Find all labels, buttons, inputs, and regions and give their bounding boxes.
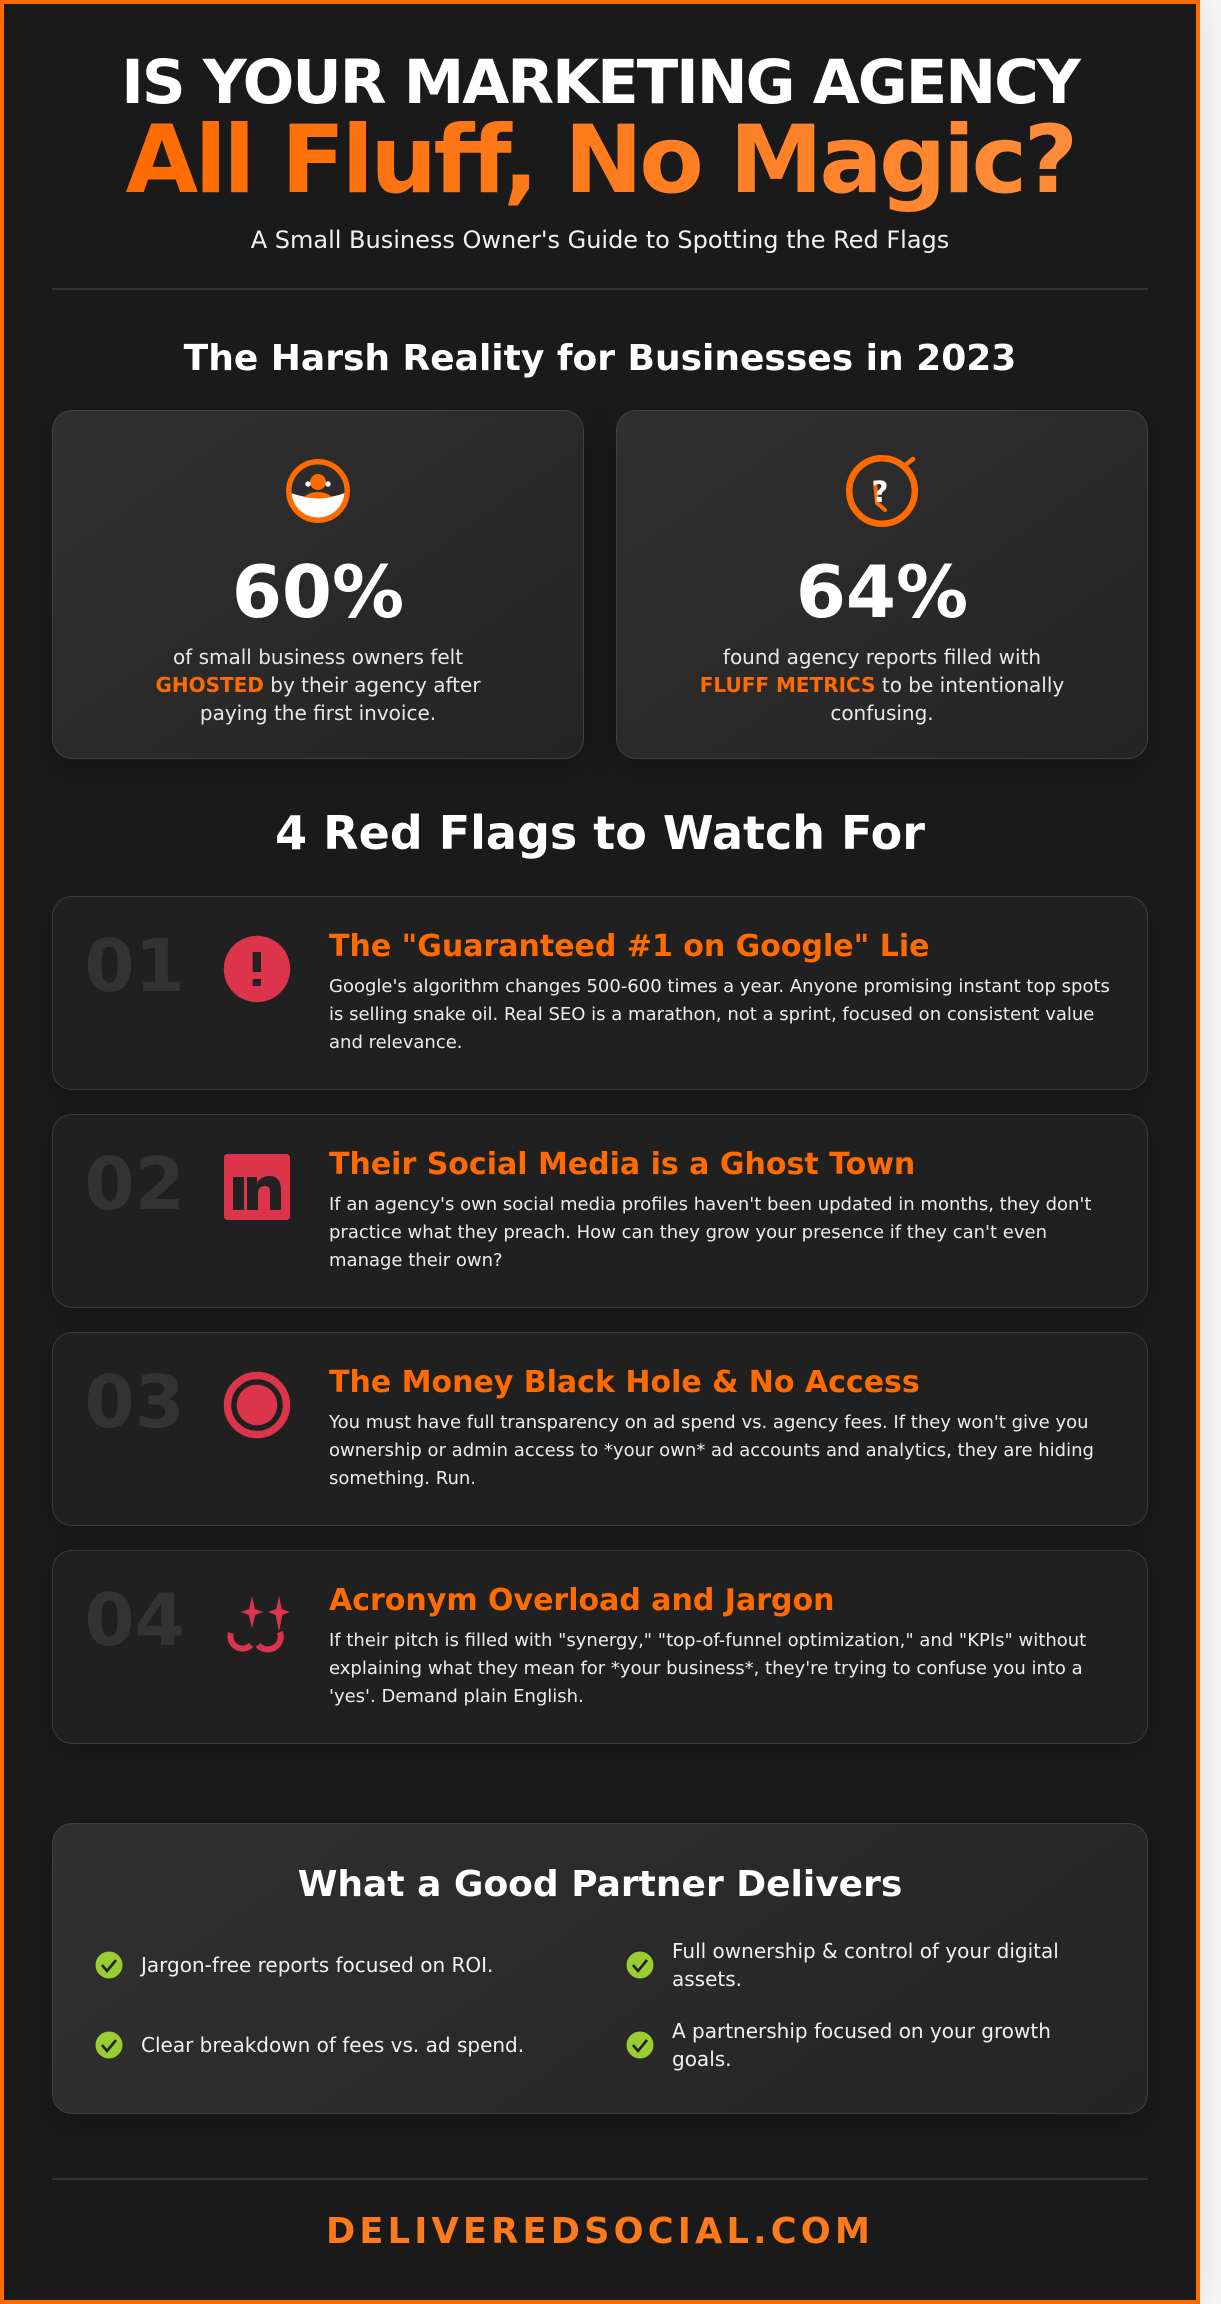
flag body: ownership or admin access to *your own* ad accounts and analytics, they are hiding — [329, 1440, 1094, 1460]
item text: Clear breakdown of fees vs. ad spend. — [141, 2033, 524, 2057]
flag number: 02 — [84, 1142, 185, 1226]
item text — [672, 2019, 1051, 2071]
partner heading: What a Good Partner Delivers — [298, 1864, 902, 1905]
stat description — [155, 645, 481, 725]
icon: check — [96, 2032, 122, 2058]
flag body: and relevance. — [329, 1032, 463, 1052]
panel: flag 02 — [52, 1114, 1148, 1308]
flag body — [329, 1630, 1086, 1706]
icon: black hole target — [224, 1372, 290, 1438]
item text: A partnership focused on your growth — [672, 2019, 1051, 2043]
icon: exclamation — [224, 936, 290, 1002]
icon: check — [96, 1952, 122, 1978]
icon: ghosted person — [286, 459, 350, 523]
flag body: is selling snake oil. Real SEO is a marathon, not a sprint, focused on consistent value — [329, 1004, 1094, 1024]
item text — [672, 1939, 1059, 1991]
panel: flag 04 — [52, 1550, 1148, 1744]
icon: magnifying clock question: ? — [872, 475, 888, 509]
flag body: something. Run. — [329, 1468, 476, 1488]
item text: Full ownership & control of your digital — [672, 1939, 1059, 1963]
stat description: GHOSTED by their agency after — [155, 673, 481, 697]
panel: stat 64% — [616, 410, 1148, 759]
panel: flag 03 — [52, 1332, 1148, 1526]
heading: harsh reality: The Harsh Reality for Businesses in 2023 — [184, 338, 1016, 379]
flag body — [329, 976, 1110, 1052]
stat number 60%: 60% — [232, 550, 404, 634]
panel: stat 60% — [52, 410, 584, 759]
subtitle: A Small Business Owner's Guide to Spotting the Red Flags — [251, 226, 949, 254]
item text: Jargon-free reports focused on ROI. — [141, 1953, 493, 1977]
stat description — [700, 645, 1064, 725]
icon: check — [626, 2032, 654, 2058]
flag body: Google's algorithm changes 500-600 times a year. Anyone promising instant top spots — [329, 976, 1110, 996]
title: first line: IS YOUR MARKETING AGENCY — [121, 48, 1079, 118]
title: second line: All Fluff, No Magic? — [125, 106, 1075, 214]
item: partnership — [626, 2019, 1051, 2071]
stat number 64%: 64% — [796, 550, 968, 634]
footer url: DELIVEREDSOCIAL.COM — [326, 2211, 874, 2252]
stat description: confusing. — [830, 701, 934, 725]
flag body — [329, 1412, 1094, 1488]
flag title: The Money Black Hole & No Access — [329, 1365, 920, 1400]
flag body: You must have full transparency on ad spend vs. agency fees. If they won't give you — [329, 1412, 1089, 1432]
flag number: 03 — [84, 1360, 185, 1444]
item: jargon-free — [96, 1952, 493, 1978]
flag body: explaining what they mean for *your business*, they're trying to confuse you into a — [329, 1658, 1083, 1678]
heading: red flags: 4 Red Flags to Watch For — [275, 806, 925, 860]
flag body: practice what they preach. How can they grow your presence if they can't even — [329, 1222, 1047, 1242]
item: ownership — [626, 1939, 1059, 1991]
icon: sparkles and swirls — [227, 1596, 290, 1652]
stat description: FLUFF METRICS to be intentionally — [700, 673, 1064, 697]
icon: linkedin — [224, 1154, 290, 1220]
flag title: The "Guaranteed #1 on Google" Lie — [329, 929, 929, 964]
flag number: 01 — [84, 924, 185, 1008]
item: fees — [96, 2032, 524, 2058]
flag body: If an agency's own social media profiles haven't been updated in months, they don't — [329, 1194, 1091, 1214]
item text: assets. — [672, 1967, 742, 1991]
flag title: Acronym Overload and Jargon — [329, 1583, 834, 1618]
icon: magnifying clock question — [846, 455, 918, 527]
flag number: 04 — [84, 1578, 185, 1662]
stat description: of small business owners felt — [173, 645, 463, 669]
panel: flag 01 — [52, 896, 1148, 1090]
icon: check — [626, 1952, 654, 1978]
stat description: paying the first invoice. — [200, 701, 436, 725]
stat description: found agency reports filled with — [723, 645, 1041, 669]
flag body: 'yes'. Demand plain English. — [329, 1686, 584, 1706]
flag body: If their pitch is filled with "synergy," "top-of-funnel optimization," and "KPIs" without — [329, 1630, 1086, 1650]
item text: goals. — [672, 2047, 732, 2071]
flag title: Their Social Media is a Ghost Town — [329, 1147, 915, 1182]
flag body — [329, 1194, 1091, 1270]
panel: good partner — [52, 1823, 1148, 2114]
flag body: manage their own? — [329, 1250, 503, 1270]
